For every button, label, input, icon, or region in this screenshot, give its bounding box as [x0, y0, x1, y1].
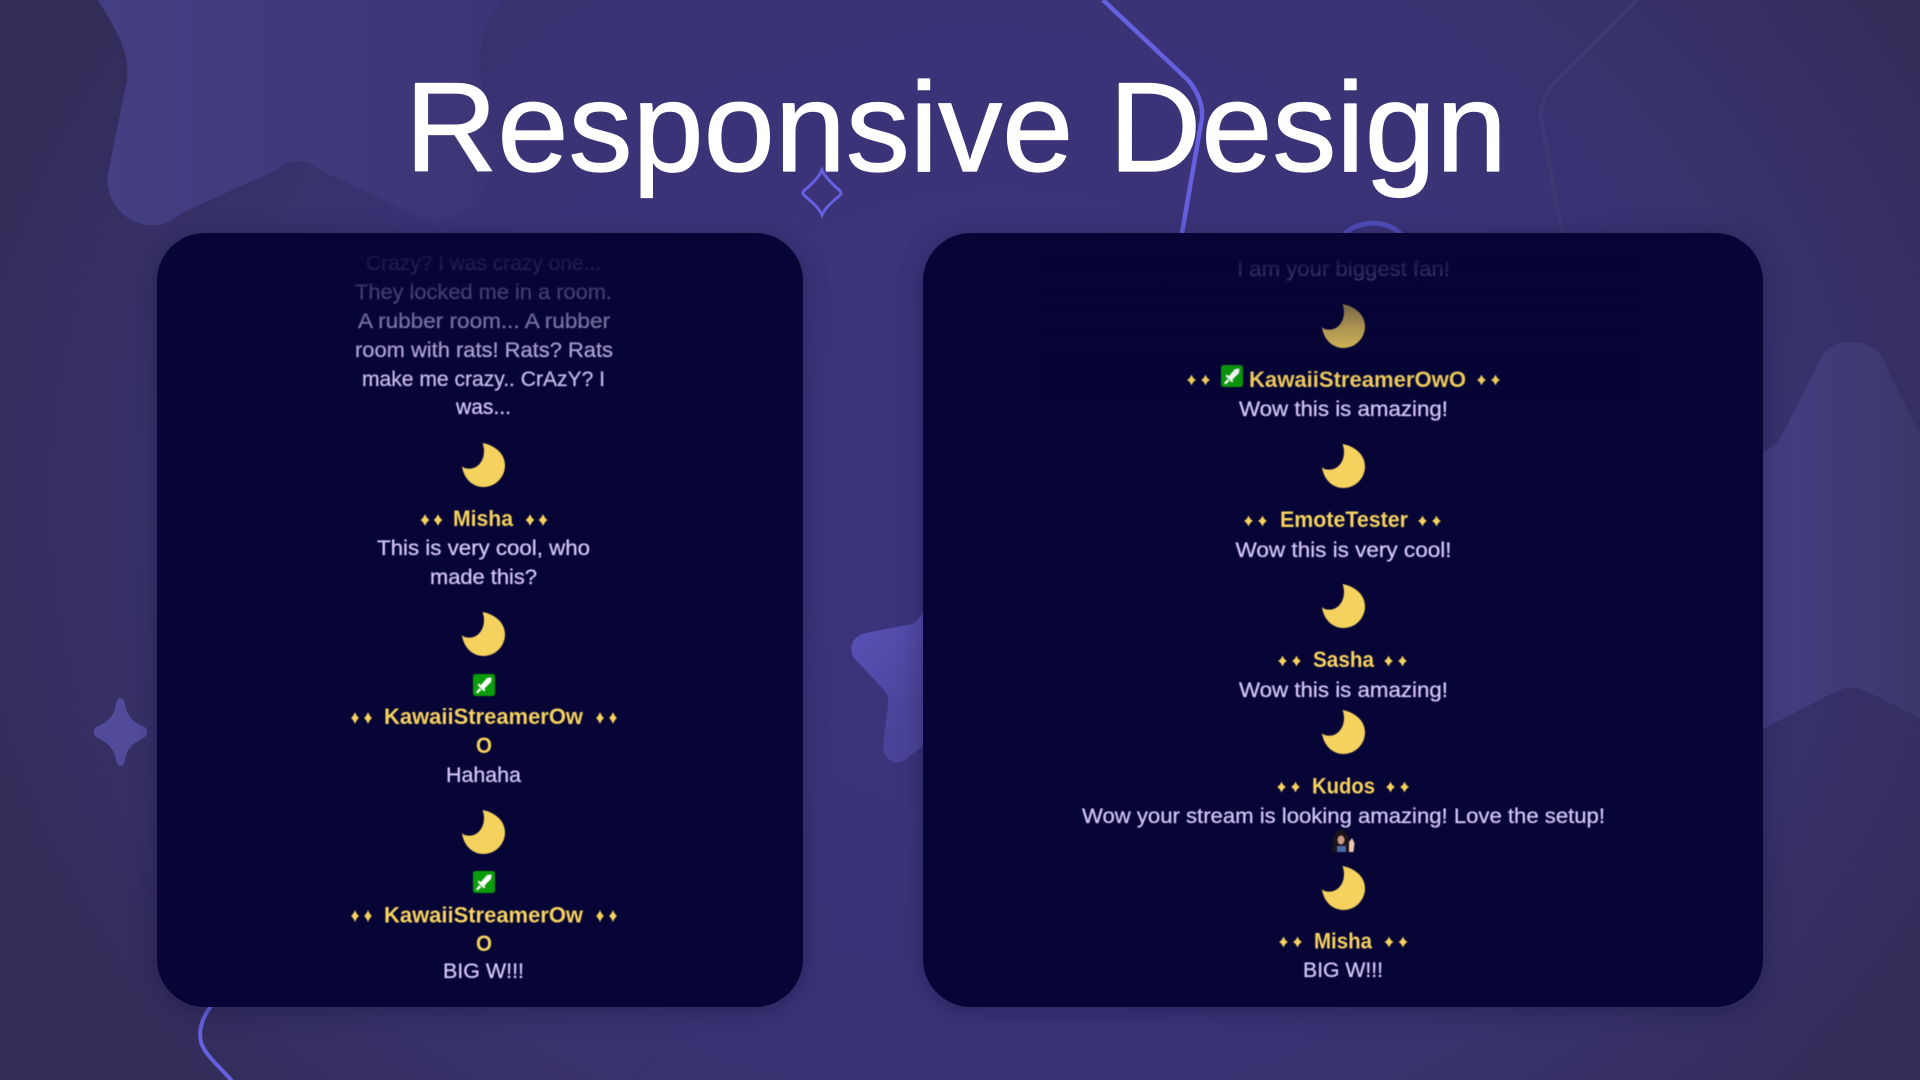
decorative outline: faint bottom: [630, 1057, 658, 1080]
decorative sparkle: left filled: [94, 698, 147, 766]
message: long text: room with rats! Rats? Rats: [355, 338, 613, 362]
message: Sasha: [1239, 647, 1448, 702]
decorative outline: star behind title: [1103, 0, 1202, 233]
panel: narrow chat: [157, 233, 803, 1007]
fade overlay: wide: [1040, 233, 1640, 400]
icon: moon: [462, 810, 505, 854]
message: KawaiiStreamerOwO 2: BIG W!!!: [443, 959, 524, 983]
message: EmoteTester: Wow this is very cool!: [1236, 538, 1452, 562]
message: KawaiiStreamerOwO 1: O: [476, 733, 492, 758]
message: Misha: made this?: [430, 565, 537, 589]
icon: moon: [1322, 444, 1365, 488]
decorative star: right: [1763, 342, 1920, 729]
message: top faded: I am your biggest fan!: [1237, 257, 1450, 281]
panel background: wide: [923, 233, 1763, 1007]
message: long text: A rubber room... A rubber: [358, 309, 610, 333]
message: KawaiiStreamerOwO 1: Hahaha: [446, 763, 521, 787]
decorative outline: faint star right: [1541, 0, 1637, 233]
message: KawaiiStreamerOwO: KawaiiStreamerOwO: [1249, 367, 1466, 392]
message: long text: [355, 251, 613, 419]
icon: moon: [1322, 710, 1365, 754]
decorative ring arc behind right panel: [1343, 223, 1402, 236]
icon: sword badge: [473, 871, 495, 893]
message: Kudos: [1082, 774, 1605, 828]
decorative sparkle: outline under title: [803, 170, 841, 215]
chat messages: wide: [1082, 257, 1605, 982]
decorative star: top left: [98, 0, 502, 225]
message: KawaiiStreamerOwO 2: [351, 902, 617, 983]
message: KawaiiStreamerOwO: [1187, 365, 1500, 421]
panel: wide chat: [923, 233, 1763, 1007]
icon: moon: [462, 612, 505, 656]
icon: moon: [1322, 584, 1365, 628]
message: Misha: This is very cool, who: [377, 536, 590, 560]
message: long text: Crazy? I was crazy one...: [366, 251, 601, 275]
message: Misha: [1279, 928, 1408, 982]
icon: waving streamer emote: [1332, 830, 1354, 852]
message: KawaiiStreamerOwO 1: [351, 704, 617, 787]
message: Kudos: Kudos: [1312, 774, 1375, 798]
fade overlay: narrow: [300, 233, 670, 400]
icon: moon: [1322, 304, 1365, 348]
panel background: narrow: [157, 233, 803, 1007]
message: Misha: Misha: [1314, 928, 1373, 954]
icon: moon: [1322, 866, 1365, 910]
message: KawaiiStreamerOwO 2: KawaiiStreamerOw: [384, 902, 584, 928]
message: Sasha: Wow this is amazing!: [1239, 678, 1448, 702]
decorative star: middle: [851, 594, 930, 763]
message: long text: was...: [455, 395, 511, 419]
message: Misha: Misha: [453, 506, 514, 531]
message: long text: make me crazy.. CrAzY? I: [362, 367, 605, 391]
message: Kudos: Wow your stream is looking amazing! Love the setup!: [1082, 804, 1605, 828]
message: Sasha: Sasha: [1313, 647, 1375, 672]
message: EmoteTester: [1236, 507, 1452, 562]
icon: moon: [462, 443, 505, 487]
icon: sword badge: [473, 674, 495, 696]
message: KawaiiStreamerOwO 1: KawaiiStreamerOw: [384, 704, 584, 729]
message: EmoteTester: EmoteTester: [1280, 507, 1408, 532]
message: KawaiiStreamerOwO 2: O: [476, 931, 492, 956]
chat messages: narrow: [351, 251, 617, 983]
decorative outline: bottom left: [200, 1004, 232, 1080]
message: long text: They locked me in a room.: [355, 280, 612, 304]
message: KawaiiStreamerOwO: Wow this is amazing!: [1239, 397, 1448, 421]
message: Misha: BIG W!!!: [1303, 958, 1383, 982]
message: Misha: [377, 506, 590, 589]
title: Responsive Design: [405, 56, 1507, 198]
